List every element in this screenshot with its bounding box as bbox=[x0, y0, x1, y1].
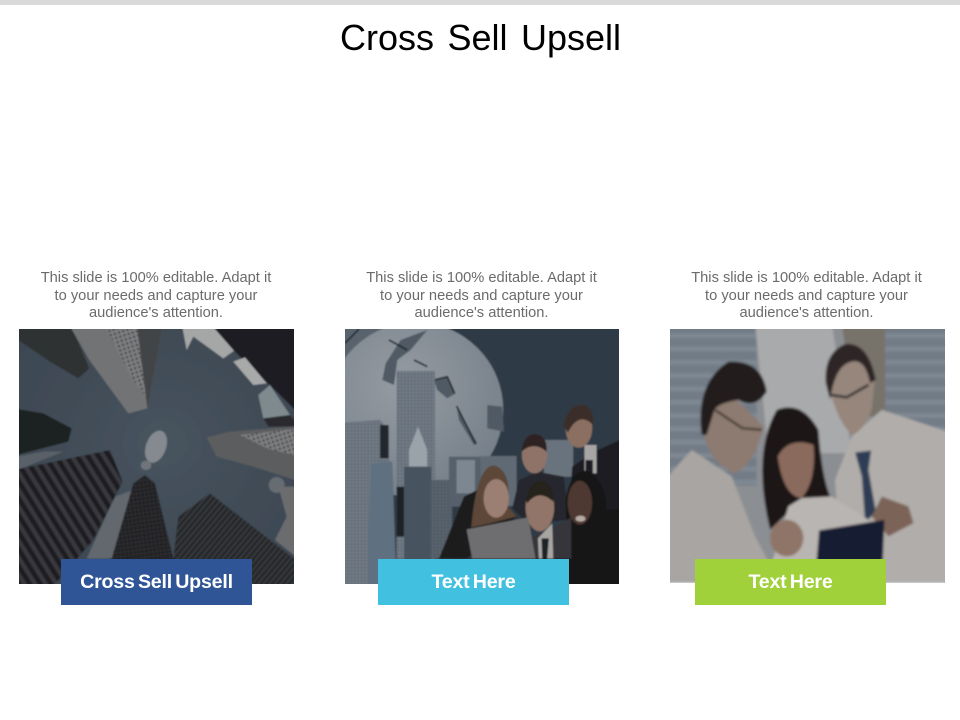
label: Text Here (green) bbox=[695, 559, 886, 605]
top-left tower bbox=[13, 323, 89, 378]
label: Text Here (blue): Text Here bbox=[431, 571, 516, 593]
text block: column 1 bbox=[41, 270, 272, 321]
photo: business team with globe and city bbox=[345, 329, 619, 584]
text block: column 3: This slide is 100% editable. Adapt it bbox=[691, 270, 922, 286]
office background bbox=[662, 323, 757, 485]
woman centre bbox=[762, 407, 830, 530]
man right bbox=[835, 410, 952, 586]
label: Cross Sell Upsell bbox=[61, 559, 252, 605]
text block: column 1: audience's attention. bbox=[89, 305, 223, 321]
text block: column 2: audience's attention. bbox=[414, 305, 548, 321]
man top right bbox=[563, 437, 627, 590]
hand and clipboard bbox=[872, 496, 913, 536]
text block: column 3: audience's attention. bbox=[740, 305, 874, 321]
text block: column 3: to your needs and capture your bbox=[705, 288, 908, 304]
woman left bbox=[438, 490, 517, 559]
title: Cross Sell Upsell bbox=[340, 17, 621, 58]
laptop bbox=[466, 517, 535, 559]
woman right bbox=[565, 471, 627, 590]
text block: column 2: This slide is 100% editable. Adapt it bbox=[366, 270, 597, 286]
label: Cross Sell Upsell: Cross Sell Upsell bbox=[80, 571, 233, 593]
clouds bbox=[141, 428, 171, 470]
text block: column 3 bbox=[691, 270, 922, 321]
right tower bbox=[207, 426, 300, 482]
bottom-right tower bbox=[173, 493, 300, 590]
bottom centre tower bbox=[112, 475, 173, 559]
man front bbox=[530, 517, 571, 559]
label: Text Here (blue) bbox=[378, 559, 569, 605]
text block: column 1: This slide is 100% editable. Adapt it bbox=[41, 270, 271, 286]
man left bbox=[662, 450, 782, 586]
globe bbox=[328, 322, 503, 498]
man centre bbox=[512, 472, 568, 523]
text block: column 2 bbox=[366, 270, 597, 321]
bottom-left tower bbox=[13, 450, 123, 590]
text block: column 1: to your needs and capture your bbox=[55, 288, 257, 304]
top-right towers bbox=[182, 323, 235, 358]
photo: skyscrapers seen from below bbox=[19, 329, 294, 584]
top bar bbox=[0, 0, 960, 5]
left dark tower bbox=[13, 408, 72, 456]
text block: column 2: to your needs and capture your bbox=[380, 288, 583, 304]
people bbox=[438, 405, 627, 590]
towers bbox=[396, 371, 434, 559]
label: Text Here (green): Text Here bbox=[748, 571, 833, 593]
photo: three colleagues reviewing a clipboard bbox=[670, 329, 945, 583]
